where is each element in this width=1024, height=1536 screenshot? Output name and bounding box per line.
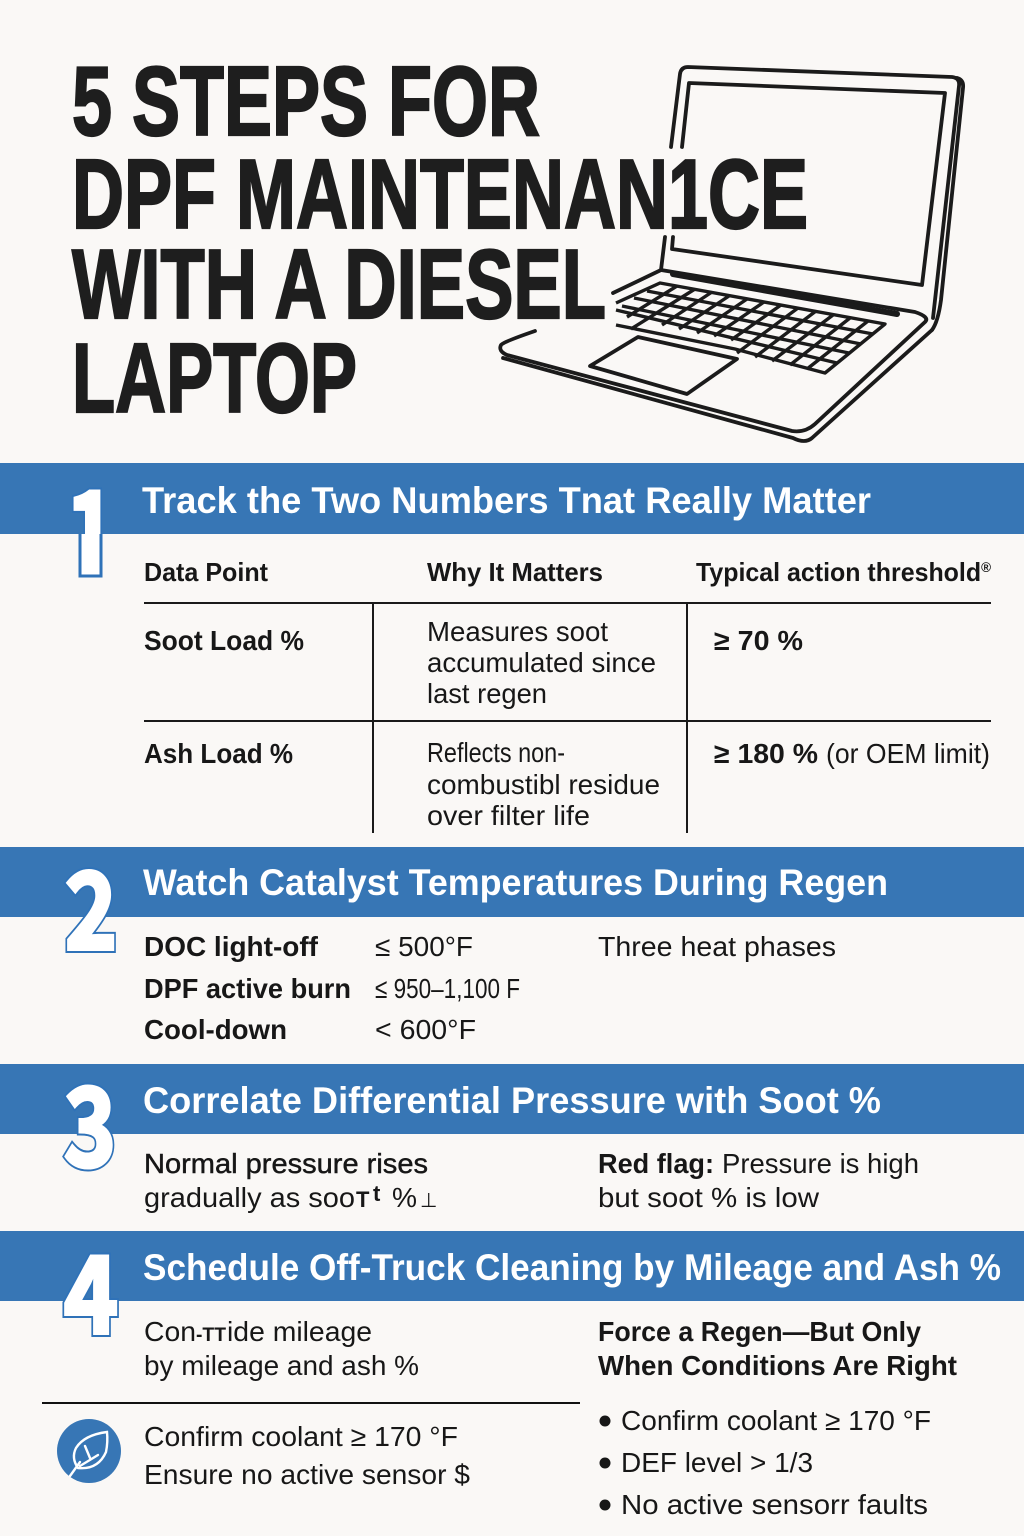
text block: mileage: -TT: [196, 1325, 226, 1346]
text block: normal pressure: gradually as soo: [144, 1182, 355, 1213]
step number 2: 2: [65, 826, 117, 980]
text block: mileage: Con: [144, 1316, 196, 1347]
title: WITH A DIESEL: [72, 229, 606, 339]
step number 4: 4: [64, 1210, 118, 1364]
text block: red flag: Pressure is high: [722, 1148, 919, 1179]
text block: red flag: Red flag:: [598, 1148, 714, 1179]
step number 2: 2: [65, 826, 117, 980]
panel: step 1 header band: Track the Two Numbers Tnat Really Matter: [142, 480, 871, 521]
keyboard outline and keys: [616, 283, 885, 373]
text block: heat phases: [144, 931, 836, 1045]
text block: red flag: but soot % is low: [598, 1182, 820, 1213]
panel: step 4 header band: [0, 1231, 1024, 1301]
title: [72, 46, 808, 433]
table: data points: [144, 557, 992, 833]
icon: leaf in circle: [57, 1419, 121, 1483]
step number 1: 1: [66, 442, 116, 606]
table: data points: Reflects non-: [427, 737, 565, 768]
bullet list: regen conditions: DEF level > 1/3: [621, 1447, 813, 1478]
text block: normal pressure: ⊥: [420, 1190, 437, 1212]
bullet list: regen conditions: Confirm coolant ≥ 170 °F: [621, 1405, 931, 1436]
table: data points: combustibl residue: [427, 769, 660, 800]
text block: mileage: by mileage and ash %: [144, 1350, 419, 1381]
text block: heat phases: DPF active burn: [144, 973, 351, 1004]
heading: force a regen: When Conditions Are Right: [598, 1350, 957, 1381]
panel: step 3 header band: [0, 1064, 1024, 1134]
table: data points: ≥ 70 %: [714, 625, 803, 656]
table: data points: ®: [981, 559, 992, 575]
text block: heat phases: ≤ 950–1,100 F: [375, 973, 520, 1004]
text block: heat phases: ≤ 500°F: [375, 931, 473, 962]
text block: confirm coolant: Confirm coolant ≥ 170 °F: [144, 1421, 458, 1452]
bullet list: regen conditions: No active sensorr faults: [621, 1489, 928, 1520]
step number 4: 4: [64, 1210, 118, 1364]
table: data points: Soot Load %: [144, 625, 304, 656]
table: data points: accumulated since: [427, 647, 656, 678]
text block: mileage: [144, 1316, 419, 1381]
table: data points: ≥ 180 %: [714, 738, 818, 769]
step number 1: 1: [66, 442, 116, 606]
text block: mileage: ide mileage: [227, 1316, 372, 1347]
text block: confirm coolant: Ensure no active sensor $: [144, 1459, 470, 1490]
table: data points: Typical action threshold: [696, 557, 993, 587]
text block: normal pressure: Normal pressure rises: [144, 1148, 428, 1179]
panel: step 2 header band: Watch Catalyst Temperatures During Regen: [143, 862, 888, 903]
panel: step 2 header band: [0, 847, 1024, 917]
text block: confirm coolant: [144, 1421, 470, 1490]
text block: heat phases: Cool-down: [144, 1014, 287, 1045]
text block: red flag: [598, 1148, 919, 1213]
text block: heat phases: Three heat phases: [598, 931, 836, 962]
text block: normal pressure: T: [356, 1187, 370, 1212]
table: data points: Measures soot: [427, 616, 608, 647]
table: data points: Why It Matters: [427, 557, 603, 587]
table: data points: Data Point: [144, 557, 268, 587]
text block: normal pressure: [144, 1148, 437, 1213]
table: data points: last regen: [427, 678, 547, 709]
table: data points: Ash Load %: [144, 738, 293, 769]
heading: force a regen: Force a Regen—But Only: [598, 1316, 921, 1347]
panel: step 3 header band: Correlate Differential Pressure with Soot %: [143, 1080, 881, 1121]
table: data points: (or OEM limit): [826, 738, 990, 769]
text block: normal pressure: %: [392, 1182, 417, 1213]
panel: step 4 header band: Schedule Off-Truck Cleaning by Mileage and Ash %: [143, 1247, 1001, 1288]
text block: heat phases: < 600°F: [375, 1014, 476, 1045]
title: LAPTOP: [72, 323, 357, 433]
table: data points: over filter life: [427, 800, 590, 831]
step number 3: 3: [64, 1042, 116, 1198]
bullet list: regen conditions: [600, 1405, 931, 1520]
heading: force a regen: [598, 1316, 957, 1381]
panel: step 1 header band: [0, 463, 1024, 534]
text block: normal pressure: t: [373, 1181, 381, 1206]
divider: [42, 1402, 580, 1404]
icon: laptop line drawing: [500, 67, 963, 441]
text block: heat phases: DOC light-off: [144, 931, 319, 962]
title: 5 STEPS FOR: [72, 46, 540, 156]
step number 3: 3: [64, 1042, 116, 1198]
